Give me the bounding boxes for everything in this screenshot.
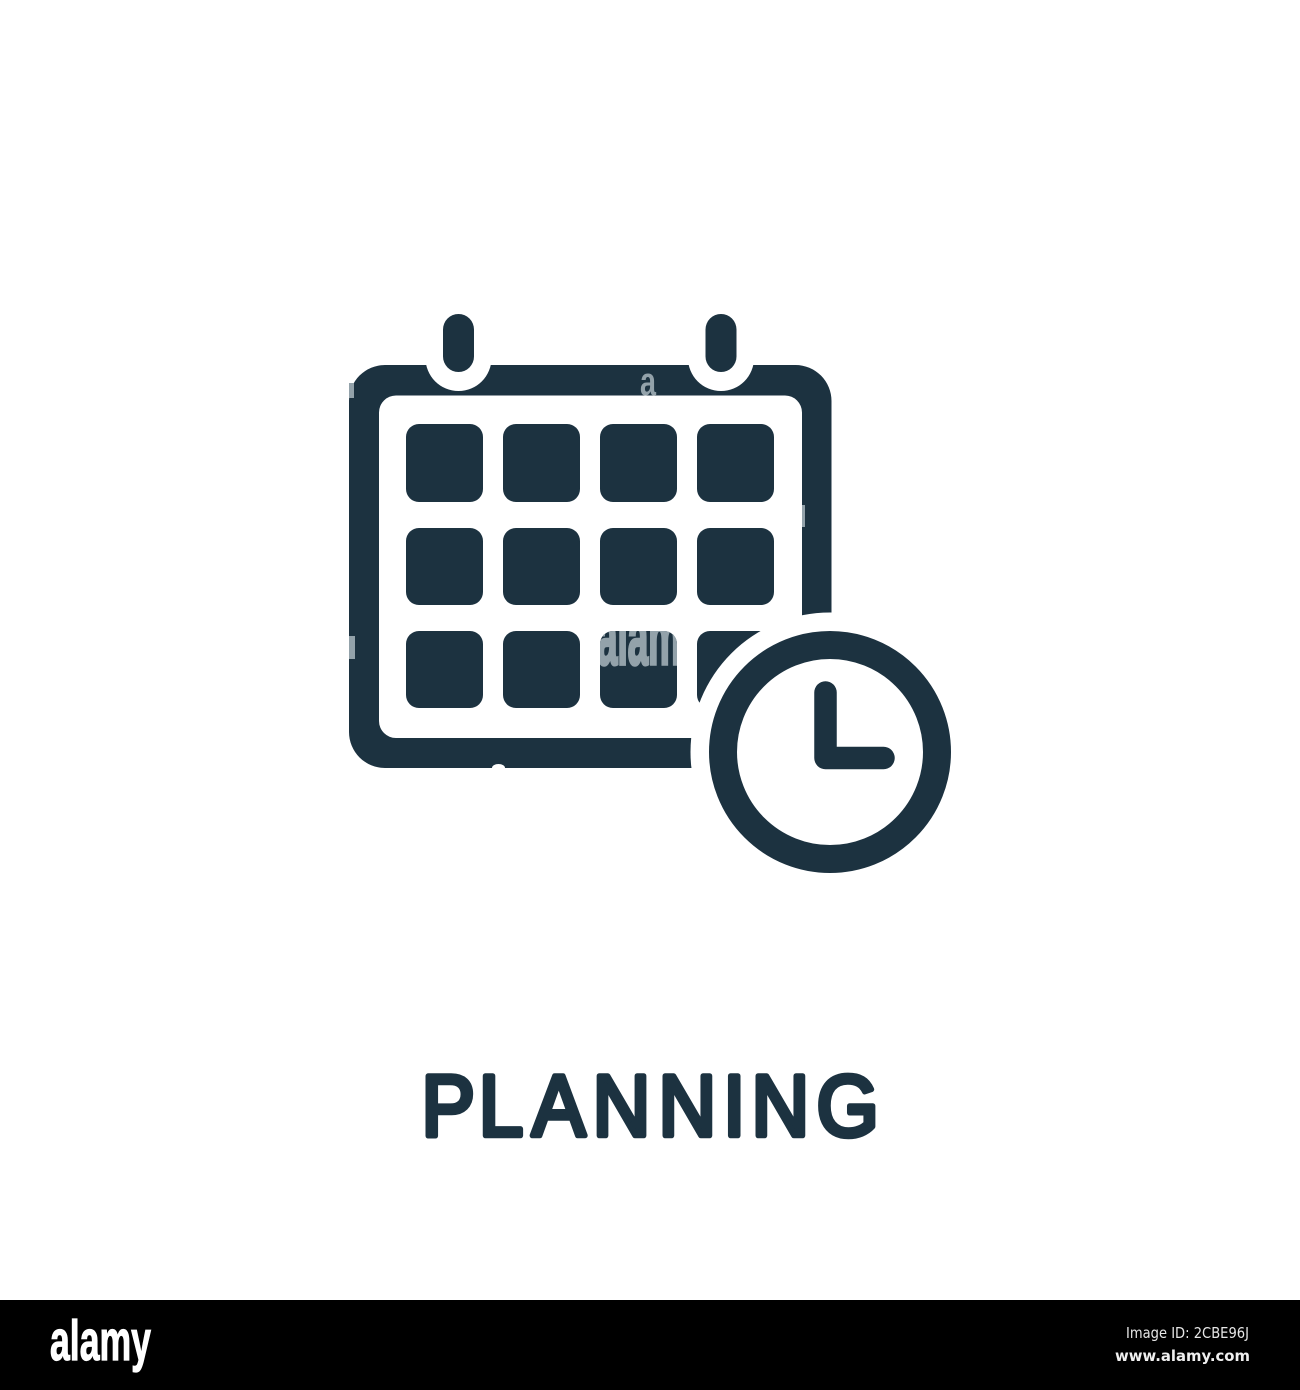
footer url: www.alamy.com (1115, 1347, 1250, 1365)
watermark fragments: a (640, 360, 657, 404)
watermark fragments: alam (597, 593, 681, 681)
calendar binding pins (443, 314, 736, 372)
infographic canvas (0, 314, 1300, 1390)
footer logo: alamy: alamy (50, 1309, 151, 1373)
icon: calendar with clock (349, 314, 937, 859)
title: planning: PLANNING (421, 1058, 879, 1154)
watermark fragments (349, 360, 805, 768)
footer image id: Image ID: 2CBE96J (1126, 1324, 1249, 1342)
calendar day squares (406, 424, 774, 708)
calendar frame (349, 365, 832, 768)
clock (723, 645, 937, 859)
footer band (0, 1300, 1300, 1390)
